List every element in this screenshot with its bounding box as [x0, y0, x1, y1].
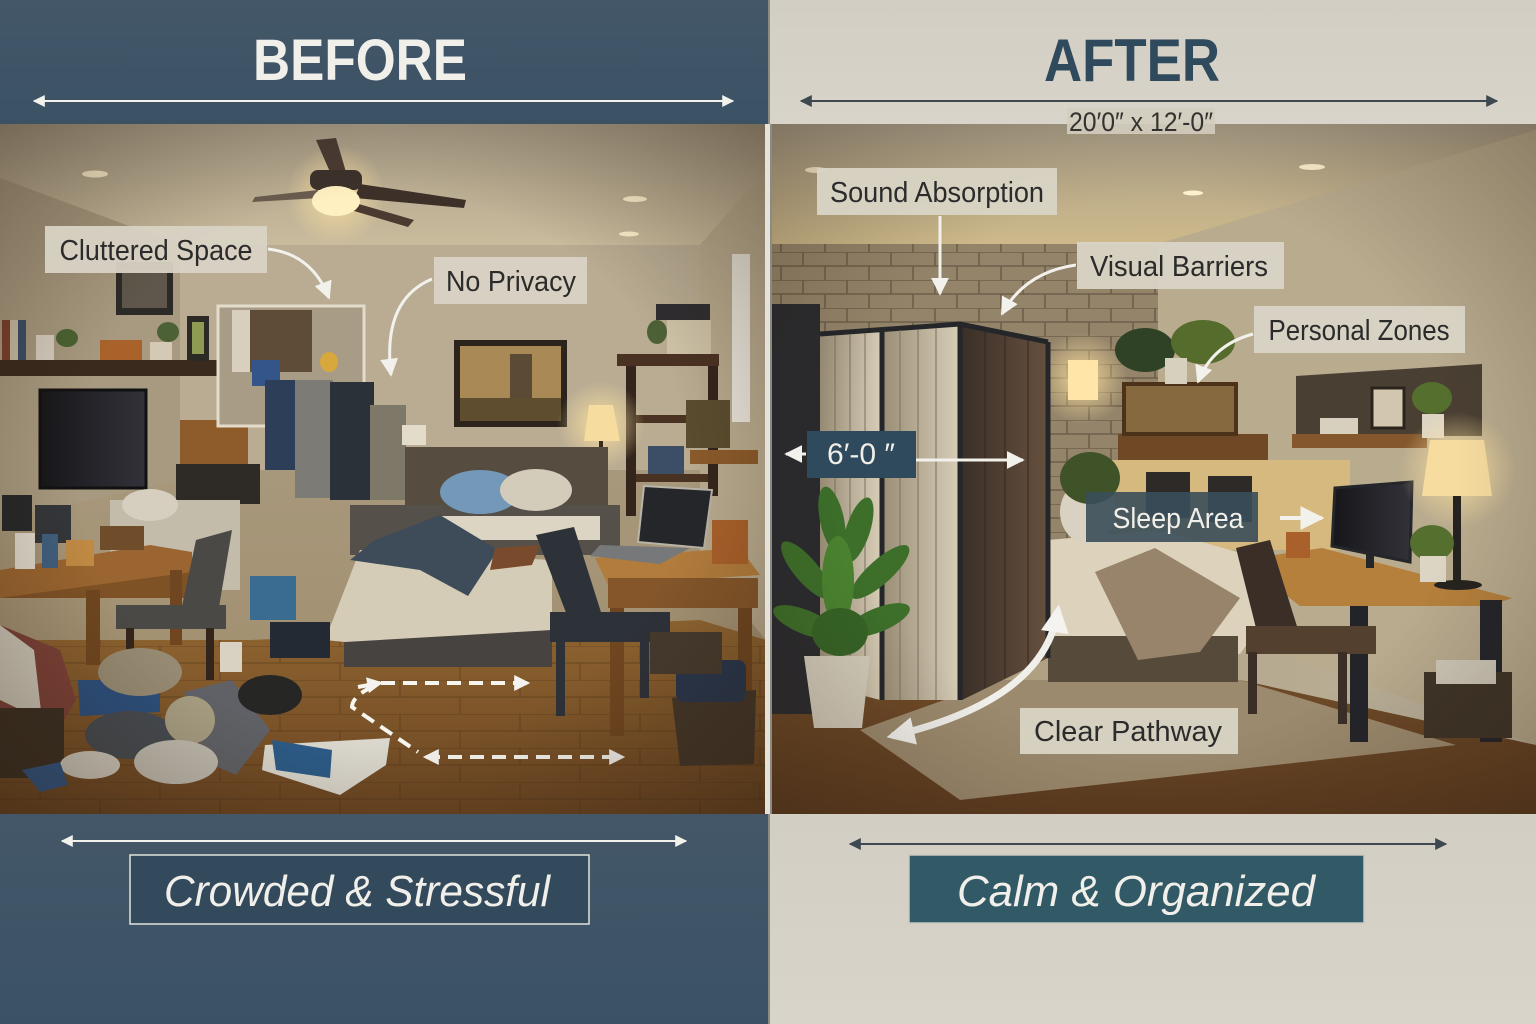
label: clear pathway: Clear Pathway [1034, 716, 1222, 748]
label: no privacy: No Privacy [446, 266, 576, 298]
panel: after footer [770, 814, 1536, 1024]
wall shelf with plants [1115, 320, 1268, 468]
headboard and monitors [1110, 460, 1350, 550]
desk right with laptop [590, 486, 760, 736]
arrow: visual barriers [1002, 265, 1076, 314]
ceiling fan [252, 138, 466, 245]
arrow: cluttered space [268, 249, 329, 298]
label: personal zones [1254, 306, 1465, 353]
label: sleep area: Sleep Area [1112, 503, 1244, 535]
shading vignette [772, 124, 1536, 814]
right chair [536, 527, 670, 716]
label: cluttered space [45, 226, 267, 273]
desk with monitor and lamp [1240, 412, 1516, 742]
back bed [350, 447, 620, 555]
arrow: sleep area [1280, 516, 1322, 520]
shading vignette [0, 124, 766, 814]
arrow: partition height right [916, 458, 1023, 462]
arrow: before footer dimension [62, 840, 686, 842]
center divider [765, 124, 770, 814]
brick back wall [772, 244, 1158, 540]
wall picture [454, 340, 567, 427]
label: sound absorption: Sound Absorption [830, 177, 1044, 209]
label: room size: 20′0″ x 12′-0″ [1069, 107, 1213, 137]
panel: before header [0, 0, 768, 124]
arrow: partition height left [786, 452, 806, 456]
label: partition height [807, 431, 916, 478]
pathway arrow [892, 610, 1058, 736]
floor [772, 680, 1536, 814]
label: visual barriers: Visual Barriers [1090, 251, 1268, 283]
badge: crowded and stressful [130, 855, 589, 924]
basket and bag [650, 632, 756, 766]
bed [1048, 452, 1300, 682]
label: cluttered space: Cluttered Space [60, 235, 252, 267]
label: sound absorption [817, 168, 1057, 215]
floor clutter pile [0, 625, 390, 795]
sconce [1036, 332, 1128, 424]
rug [860, 680, 1456, 800]
arrow: sound absorption [938, 216, 942, 294]
folding partition screen [772, 304, 1048, 714]
arrow: personal zones [1198, 334, 1253, 382]
arrow: after width dimension [801, 100, 1497, 102]
panel: before footer [0, 814, 768, 1024]
arrow: no privacy [390, 279, 432, 375]
label: no privacy [434, 257, 587, 304]
potted plant [769, 484, 916, 728]
shelf left with books [0, 262, 218, 376]
blue box and floor items [220, 576, 330, 672]
ceiling lights [82, 170, 647, 236]
left bed and pillows [110, 489, 240, 590]
bookshelf right [617, 254, 758, 516]
label: visual barriers [1077, 242, 1284, 289]
arrow: after footer dimension [850, 843, 1446, 845]
label: sleep area [1086, 492, 1258, 542]
heading: after: AFTER [1044, 27, 1220, 94]
ceiling lights [805, 164, 1325, 196]
badge: calm and organized [909, 855, 1364, 923]
label: personal zones: Personal Zones [1268, 315, 1450, 347]
ceiling [0, 124, 766, 245]
badge: crowded and stressful: Crowded & Stressful [164, 867, 551, 916]
label: clear pathway [1020, 708, 1238, 754]
left wall [0, 178, 180, 520]
cabinet [180, 420, 248, 464]
badge: calm and organized: Calm & Organized [957, 867, 1317, 916]
lamp [557, 381, 645, 491]
arrow: before width dimension [34, 100, 733, 102]
right wall [1158, 130, 1536, 745]
ceiling [772, 124, 1536, 244]
heading: before: BEFORE [253, 28, 467, 93]
main bed [325, 515, 552, 667]
wall niche [1292, 364, 1482, 448]
label: partition height: 6′-0 ″ [827, 438, 895, 471]
dashed pathway arrows [352, 683, 622, 757]
closet alcove with clothes [218, 306, 426, 500]
desk left [0, 495, 192, 665]
panel: after header [770, 0, 1536, 124]
panel: after room illustration [769, 124, 1536, 814]
right wall [700, 170, 766, 640]
desk chair [1236, 540, 1376, 724]
chairs left [116, 530, 232, 680]
floor [0, 620, 766, 814]
basket [1424, 660, 1512, 738]
back wall [180, 245, 700, 470]
panel: before room illustration [0, 124, 766, 814]
TV [40, 390, 146, 488]
